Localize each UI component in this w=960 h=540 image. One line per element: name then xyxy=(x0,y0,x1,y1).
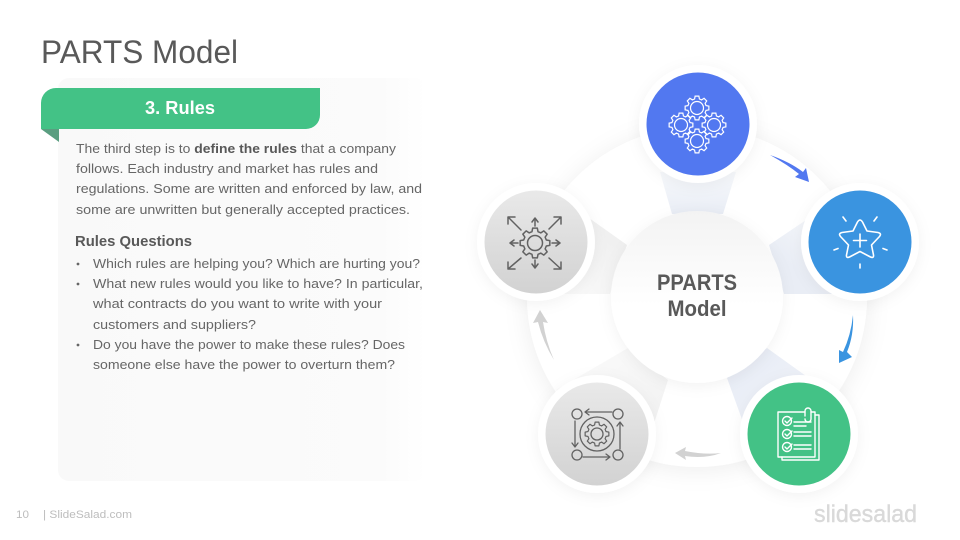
arrow: green to gray xyxy=(675,447,721,460)
node: blue gears xyxy=(639,65,757,183)
icon: gear with arrows xyxy=(508,217,561,269)
node: blue star xyxy=(801,183,919,301)
node: gray expanding gear xyxy=(477,183,595,301)
text block: rules questions list: someone else have the power to overturn them? xyxy=(93,357,395,372)
logo: slidesalad: slidesalad xyxy=(814,501,917,528)
text block: rules questions list: Which rules are helping you? Which are hurting you? xyxy=(93,256,420,271)
text block: intro paragraph: The third step is to define the rules that a company xyxy=(76,141,396,156)
text block: rules questions list: what contracts do you want to write with your xyxy=(92,296,383,311)
arrow: blue to star xyxy=(770,155,809,182)
footer: page number and site: 10 xyxy=(16,509,29,521)
text block: rules questions list xyxy=(77,256,423,372)
text block: intro paragraph xyxy=(76,141,422,217)
arrow: star to green xyxy=(839,315,853,363)
icon: star with plus xyxy=(834,217,887,268)
arrow: gray to gray xyxy=(533,310,554,360)
large backing disc xyxy=(527,127,867,467)
node: gray process xyxy=(538,375,656,493)
text block: intro paragraph: regulations. Some are written and enforced by law, and xyxy=(76,181,422,196)
diagram: PARTS cycle xyxy=(477,65,919,493)
banner: 3. Rules xyxy=(41,88,320,142)
text block: intro paragraph: some are unwritten but generally accepted practices. xyxy=(76,202,410,217)
text block: rules questions list: customers and suppliers? xyxy=(93,317,256,332)
footer: page number and site: | SlideSalad.com xyxy=(43,509,132,521)
text block: intro paragraph: follows. Each industry and market has rules and xyxy=(76,161,378,176)
icon: process gear xyxy=(572,409,623,460)
banner: 3. Rules: 3. Rules xyxy=(145,98,215,118)
wedge connectors xyxy=(536,172,860,442)
title: PARTS Model xyxy=(41,34,238,70)
center circle: PPARTS Model: PPARTS xyxy=(657,270,737,295)
icon: four gears xyxy=(669,96,726,153)
text block: rules questions list: What new rules would you like to have? In particular, xyxy=(93,276,423,291)
icon: checklist xyxy=(778,408,819,460)
center circle: PPARTS Model xyxy=(611,211,783,383)
heading: Rules Questions: Rules Questions xyxy=(75,233,192,250)
panel: rules text card xyxy=(41,78,426,481)
node: green checklist xyxy=(740,375,858,493)
center circle: PPARTS Model: Model xyxy=(668,296,726,321)
text block: rules questions list: Do you have the power to make these rules? Does xyxy=(93,337,405,352)
